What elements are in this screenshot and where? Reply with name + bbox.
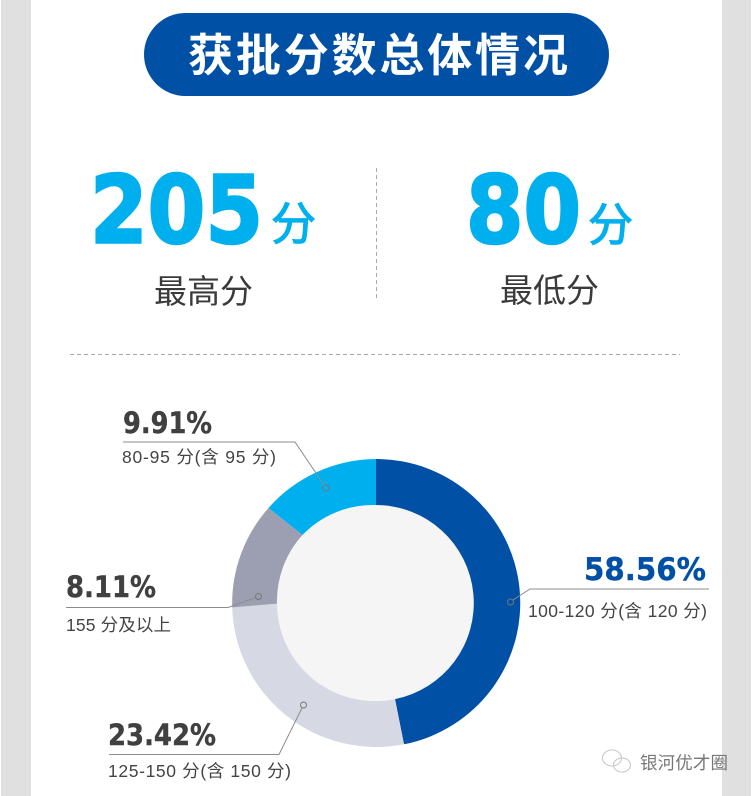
callout: 9.91%: 9.91%	[123, 406, 212, 440]
callout: 8.11%	[66, 570, 262, 635]
stat: lowest score: 分	[588, 188, 633, 254]
title pill	[144, 13, 609, 96]
stat: lowest score: 最低分	[500, 264, 599, 312]
callout: 8.11%: 8.11%	[66, 570, 156, 604]
donut chart	[232, 459, 520, 747]
stat: highest score	[90, 156, 316, 313]
segment: 100-120	[376, 459, 520, 744]
icon: chat bubbles	[602, 750, 630, 772]
stat: lowest score	[466, 156, 633, 312]
callout: 23.42%: 23.42%	[108, 718, 216, 752]
callout: 9.91%: 80-95 分(含 95 分)	[122, 447, 276, 467]
stat: highest score: 分	[271, 188, 316, 252]
callout: 9.91%	[122, 406, 329, 491]
callout: 23.42%: 125-150 分(含 150 分)	[108, 761, 291, 781]
stat: lowest score: 80	[466, 156, 581, 266]
callout: 58.56%: 58.56%	[584, 552, 706, 588]
callout: 58.56%: 100-120 分(含 120 分)	[528, 601, 707, 621]
stat: highest score: 最高分	[154, 265, 253, 313]
segment: 80-95	[268, 459, 376, 535]
callout: 8.11%: 155 分及以上	[66, 615, 171, 635]
callout: 23.42%	[108, 702, 306, 781]
segment: 155+	[232, 508, 302, 608]
segment: 125-150	[232, 604, 404, 747]
stat: highest score: 205	[90, 156, 263, 266]
watermark: 银河优才圈	[640, 750, 728, 775]
title pill: 获批分数总体情况	[188, 19, 568, 84]
callout: 58.56%	[508, 552, 709, 621]
